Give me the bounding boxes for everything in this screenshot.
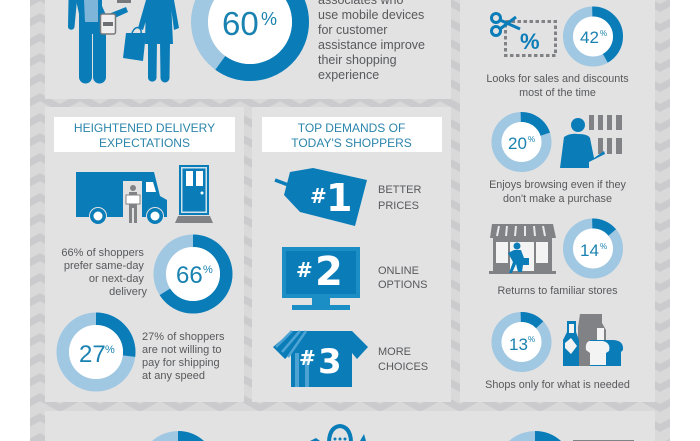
text: returns to familiar stores: Returns to familiar stores <box>497 285 618 297</box>
icon: groceries <box>563 314 623 366</box>
text: 27% statement: 27% of shoppers <box>142 331 225 343</box>
text: mobile devices statement: for customer <box>318 23 387 37</box>
heading: delivery: EXPECTATIONS <box>99 136 190 150</box>
text: 66% statement: 66% of shoppers <box>61 247 144 259</box>
icon: scissors and coupon <box>492 14 556 56</box>
heading: top demands: TODAY'S SHOPPERS <box>291 136 412 150</box>
chart: 60% donut: 60 <box>222 5 259 42</box>
text: more choices: CHOICES <box>378 361 428 373</box>
icon: #2 monitor <box>282 247 360 310</box>
text: looks for sales: most of the time <box>519 87 596 99</box>
icon: shopper and associate <box>68 0 179 84</box>
icon: #1 price tag: 1 <box>326 176 352 220</box>
chart: 60% donut <box>200 0 300 72</box>
chart: 27% donut: % <box>105 344 115 356</box>
chart: 66% donut <box>160 241 226 307</box>
chart: 14% donut: 14 <box>580 241 599 260</box>
panel: shopper types <box>460 0 655 402</box>
chart: 66% donut: % <box>203 264 213 276</box>
icon: #3 shirt: # <box>299 346 316 370</box>
text: mobile devices statement: experience <box>318 68 379 82</box>
chart: 14% donut: % <box>600 242 607 251</box>
icon: storefront with shopper <box>489 224 556 274</box>
icon: #1 price tag: # <box>310 184 327 208</box>
text: better prices: BETTER <box>378 184 421 196</box>
text: 66% statement: or next-day <box>89 273 144 285</box>
chart: 42% donut: 42 <box>580 28 599 47</box>
text: mobile devices statement: their shopping <box>318 53 397 67</box>
chart: 13% donut <box>496 317 546 367</box>
icon: #3 shirt <box>273 331 368 387</box>
chart: 20% donut: % <box>528 135 535 144</box>
chart: 42% donut: % <box>600 29 607 38</box>
heading: delivery <box>54 117 235 152</box>
text: 27% statement: at any speed <box>142 370 205 382</box>
icon: scissors and coupon: % <box>520 29 540 54</box>
chart: 60% donut: % <box>261 9 277 29</box>
text: more choices: MORE <box>378 346 411 358</box>
panel: heightened delivery expectations <box>45 107 244 402</box>
chart: 13% donut: % <box>528 335 535 344</box>
icon: bottom centre figure <box>310 426 366 441</box>
panel: mobile devices <box>45 0 451 99</box>
chart: bottom right donut <box>509 431 561 441</box>
icon: #2 monitor: 2 <box>315 249 343 295</box>
text: online options: ONLINE <box>378 265 419 277</box>
heading: top demands <box>262 117 442 152</box>
chart: 27% donut: 27 <box>79 341 106 368</box>
chart: 13% donut: 13 <box>509 335 528 354</box>
icon: #1 price tag <box>275 168 367 226</box>
text: better prices: PRICES <box>378 200 419 212</box>
chart: 20% donut: 20 <box>508 134 527 153</box>
text: 66% statement: prefer same-day <box>64 260 144 272</box>
chart: 42% donut <box>568 12 618 62</box>
panel: top demands <box>252 107 451 402</box>
icon: #3 shirt: 3 <box>318 342 342 382</box>
chart: 14% donut <box>568 224 618 274</box>
heading: delivery: HEIGHTENED DELIVERY <box>74 121 215 135</box>
chart: bottom left donut <box>152 431 204 441</box>
text: enjoys browsing: Enjoys browsing even if they <box>489 179 627 191</box>
chart: 66% donut: 66 <box>176 262 203 289</box>
chart: 27% donut <box>63 319 129 385</box>
panel: bottom row <box>45 411 655 441</box>
text: 27% statement: pay for shipping <box>142 357 220 369</box>
icon: #2 monitor: # <box>296 258 313 282</box>
heading: top demands: TOP DEMANDS OF <box>298 121 405 135</box>
text: 66% statement: delivery <box>109 286 147 298</box>
icon: person browsing shelves <box>560 115 622 168</box>
chart: 20% donut <box>496 117 546 167</box>
text: online options: OPTIONS <box>378 279 428 291</box>
text: mobile devices statement: use mobile devices <box>318 8 424 22</box>
text: shops only for what is needed: Shops only for what is needed <box>485 379 630 391</box>
icon: door <box>175 165 213 223</box>
text: 27% statement: are not willing to <box>142 344 222 356</box>
icon: bottom right grey block <box>573 440 634 441</box>
text: mobile devices statement: assistance improve <box>318 38 425 52</box>
text: looks for sales: Looks for sales and discounts <box>486 73 629 85</box>
icon: delivery truck <box>76 172 167 224</box>
text: enjoys browsing: don't make a purchase <box>503 193 612 205</box>
